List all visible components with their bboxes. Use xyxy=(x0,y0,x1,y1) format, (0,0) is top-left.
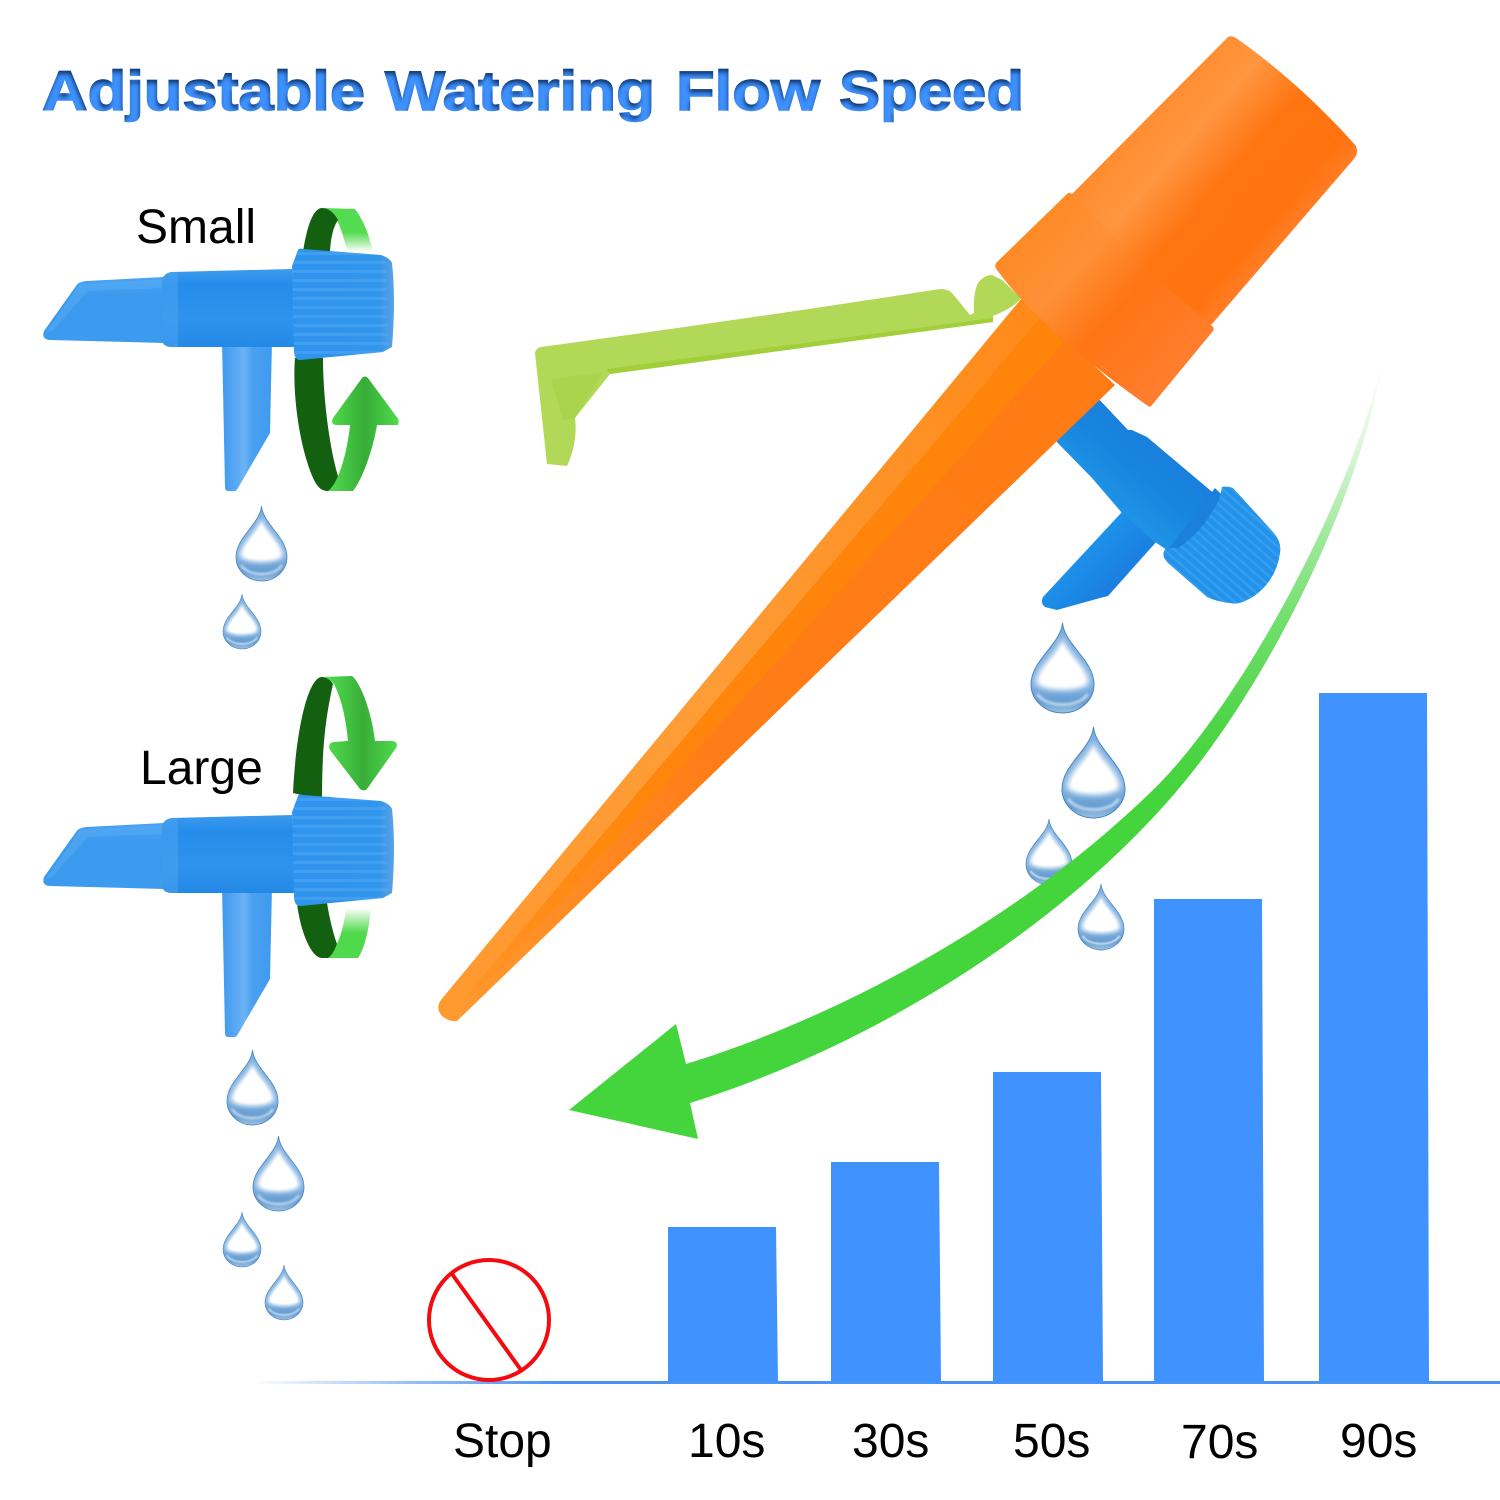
bar: 30s xyxy=(831,1162,941,1382)
icon: stop sign xyxy=(429,1260,549,1380)
blue side valve xyxy=(1042,395,1280,610)
green clip xyxy=(535,275,1021,466)
axis line xyxy=(250,1381,1500,1384)
label: Small: Small xyxy=(136,201,256,254)
title xyxy=(42,59,1024,122)
axis labels: 90s xyxy=(1340,1415,1417,1468)
nozzle: large setting xyxy=(43,795,394,1037)
axis labels: 70s xyxy=(1181,1416,1258,1469)
icon: rotation ring, clockwise direction xyxy=(293,676,397,958)
water drops: dripper xyxy=(1026,623,1125,950)
axis labels: 10s xyxy=(688,1415,765,1468)
bar chart: flow speed xyxy=(250,693,1500,1469)
axis labels: 50s xyxy=(1013,1415,1090,1468)
title: Watering xyxy=(385,59,655,122)
water drops: large flow xyxy=(223,1050,304,1320)
orange spike xyxy=(438,298,1115,1021)
nozzle: small setting xyxy=(43,249,394,491)
panel: large flow nozzle xyxy=(43,676,397,1037)
orange collar xyxy=(995,193,1214,407)
bar: 90s xyxy=(1319,693,1429,1382)
title: Flow xyxy=(676,59,820,122)
bar: 70s xyxy=(1154,899,1264,1382)
icon: rotation ring, counter direction xyxy=(294,208,399,491)
orange reservoir neck xyxy=(1055,36,1357,335)
bar: 50s xyxy=(993,1072,1103,1382)
bar: 10s xyxy=(668,1227,778,1382)
dripper stake xyxy=(438,36,1357,1021)
title: Adjustable xyxy=(42,59,365,122)
axis labels: Stop xyxy=(453,1415,552,1468)
label: Large: Large xyxy=(140,742,263,795)
axis labels xyxy=(453,1415,1417,1469)
axis labels: 30s xyxy=(852,1415,929,1468)
title: Speed xyxy=(839,59,1024,122)
water drops: small flow xyxy=(223,506,287,649)
curved arrow: flow direction xyxy=(569,360,1383,1139)
panel: small flow nozzle xyxy=(43,201,399,491)
